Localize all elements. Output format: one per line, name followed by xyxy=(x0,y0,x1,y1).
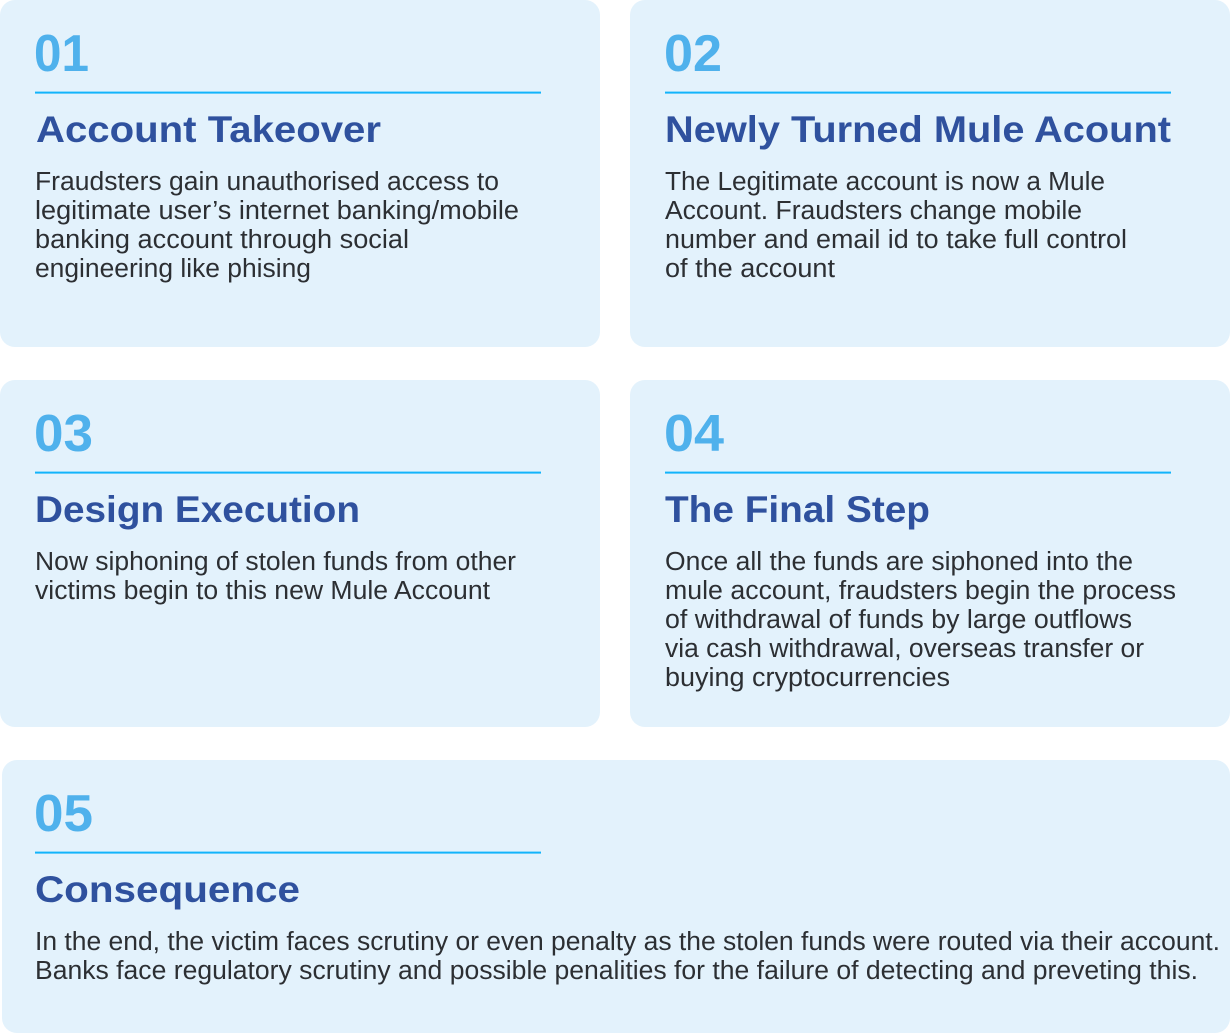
number 04: 04 xyxy=(664,405,724,463)
body text 01: legitimate user’s internet banking/mobile xyxy=(35,197,519,225)
heading: Design Execution: Design Execution xyxy=(35,489,360,530)
body text 02: The Legitimate account is now a Mule xyxy=(665,168,1105,196)
body text 01: banking account through social xyxy=(35,226,409,254)
body text 03: Now siphoning of stolen funds from other xyxy=(35,548,517,576)
panel: step 05 consequence xyxy=(2,760,1230,1033)
body text 04: of withdrawal of funds by large outflows xyxy=(665,606,1132,634)
number 03: 03 xyxy=(34,405,93,463)
heading: Account Takeover: Account Takeover xyxy=(36,109,381,150)
heading: Consequence: Consequence xyxy=(35,869,300,910)
body text 03 xyxy=(35,548,517,605)
heading: The Final Step: The Final Step xyxy=(665,489,930,530)
body text 04: buying cryptocurrencies xyxy=(665,664,950,692)
body text 04 xyxy=(665,548,1176,692)
number 05: 05 xyxy=(34,785,93,843)
body text 04: mule account, fraudsters begin the process xyxy=(665,577,1176,605)
panel: step 01 account takeover xyxy=(0,0,600,347)
body text 03: victims begin to this new Mule Account xyxy=(35,577,490,605)
heading: Newly Turned Mule Acount: Newly Turned Mule Acount xyxy=(665,109,1171,150)
body text 05 xyxy=(35,928,1220,985)
body text 01 xyxy=(35,168,519,283)
body text 02: of the account xyxy=(665,255,835,283)
body text 04: via cash withdrawal, overseas transfer or xyxy=(665,635,1145,663)
body text 05: In the end, the victim faces scrutiny or even penalty as the stolen funds were routed via their account. xyxy=(35,928,1220,956)
panel: step 03 design execution xyxy=(0,380,600,727)
body text 01: engineering like phising xyxy=(35,255,311,283)
number 01: 01 xyxy=(34,25,89,83)
body text 04: Once all the funds are siphoned into the xyxy=(665,548,1133,576)
body text 01: Fraudsters gain unauthorised access to xyxy=(35,168,499,196)
body text 05: Banks face regulatory scrutiny and possible penalities for the failure of detecting and preveting this. xyxy=(35,957,1198,985)
body text 02: Account. Fraudsters change mobile xyxy=(665,197,1082,225)
panel: step 04 the final step xyxy=(630,380,1230,727)
body text 02 xyxy=(665,168,1127,283)
panel: step 02 newly turned mule account xyxy=(630,0,1230,347)
body text 02: number and email id to take full control xyxy=(665,226,1127,254)
number 02: 02 xyxy=(664,25,722,83)
